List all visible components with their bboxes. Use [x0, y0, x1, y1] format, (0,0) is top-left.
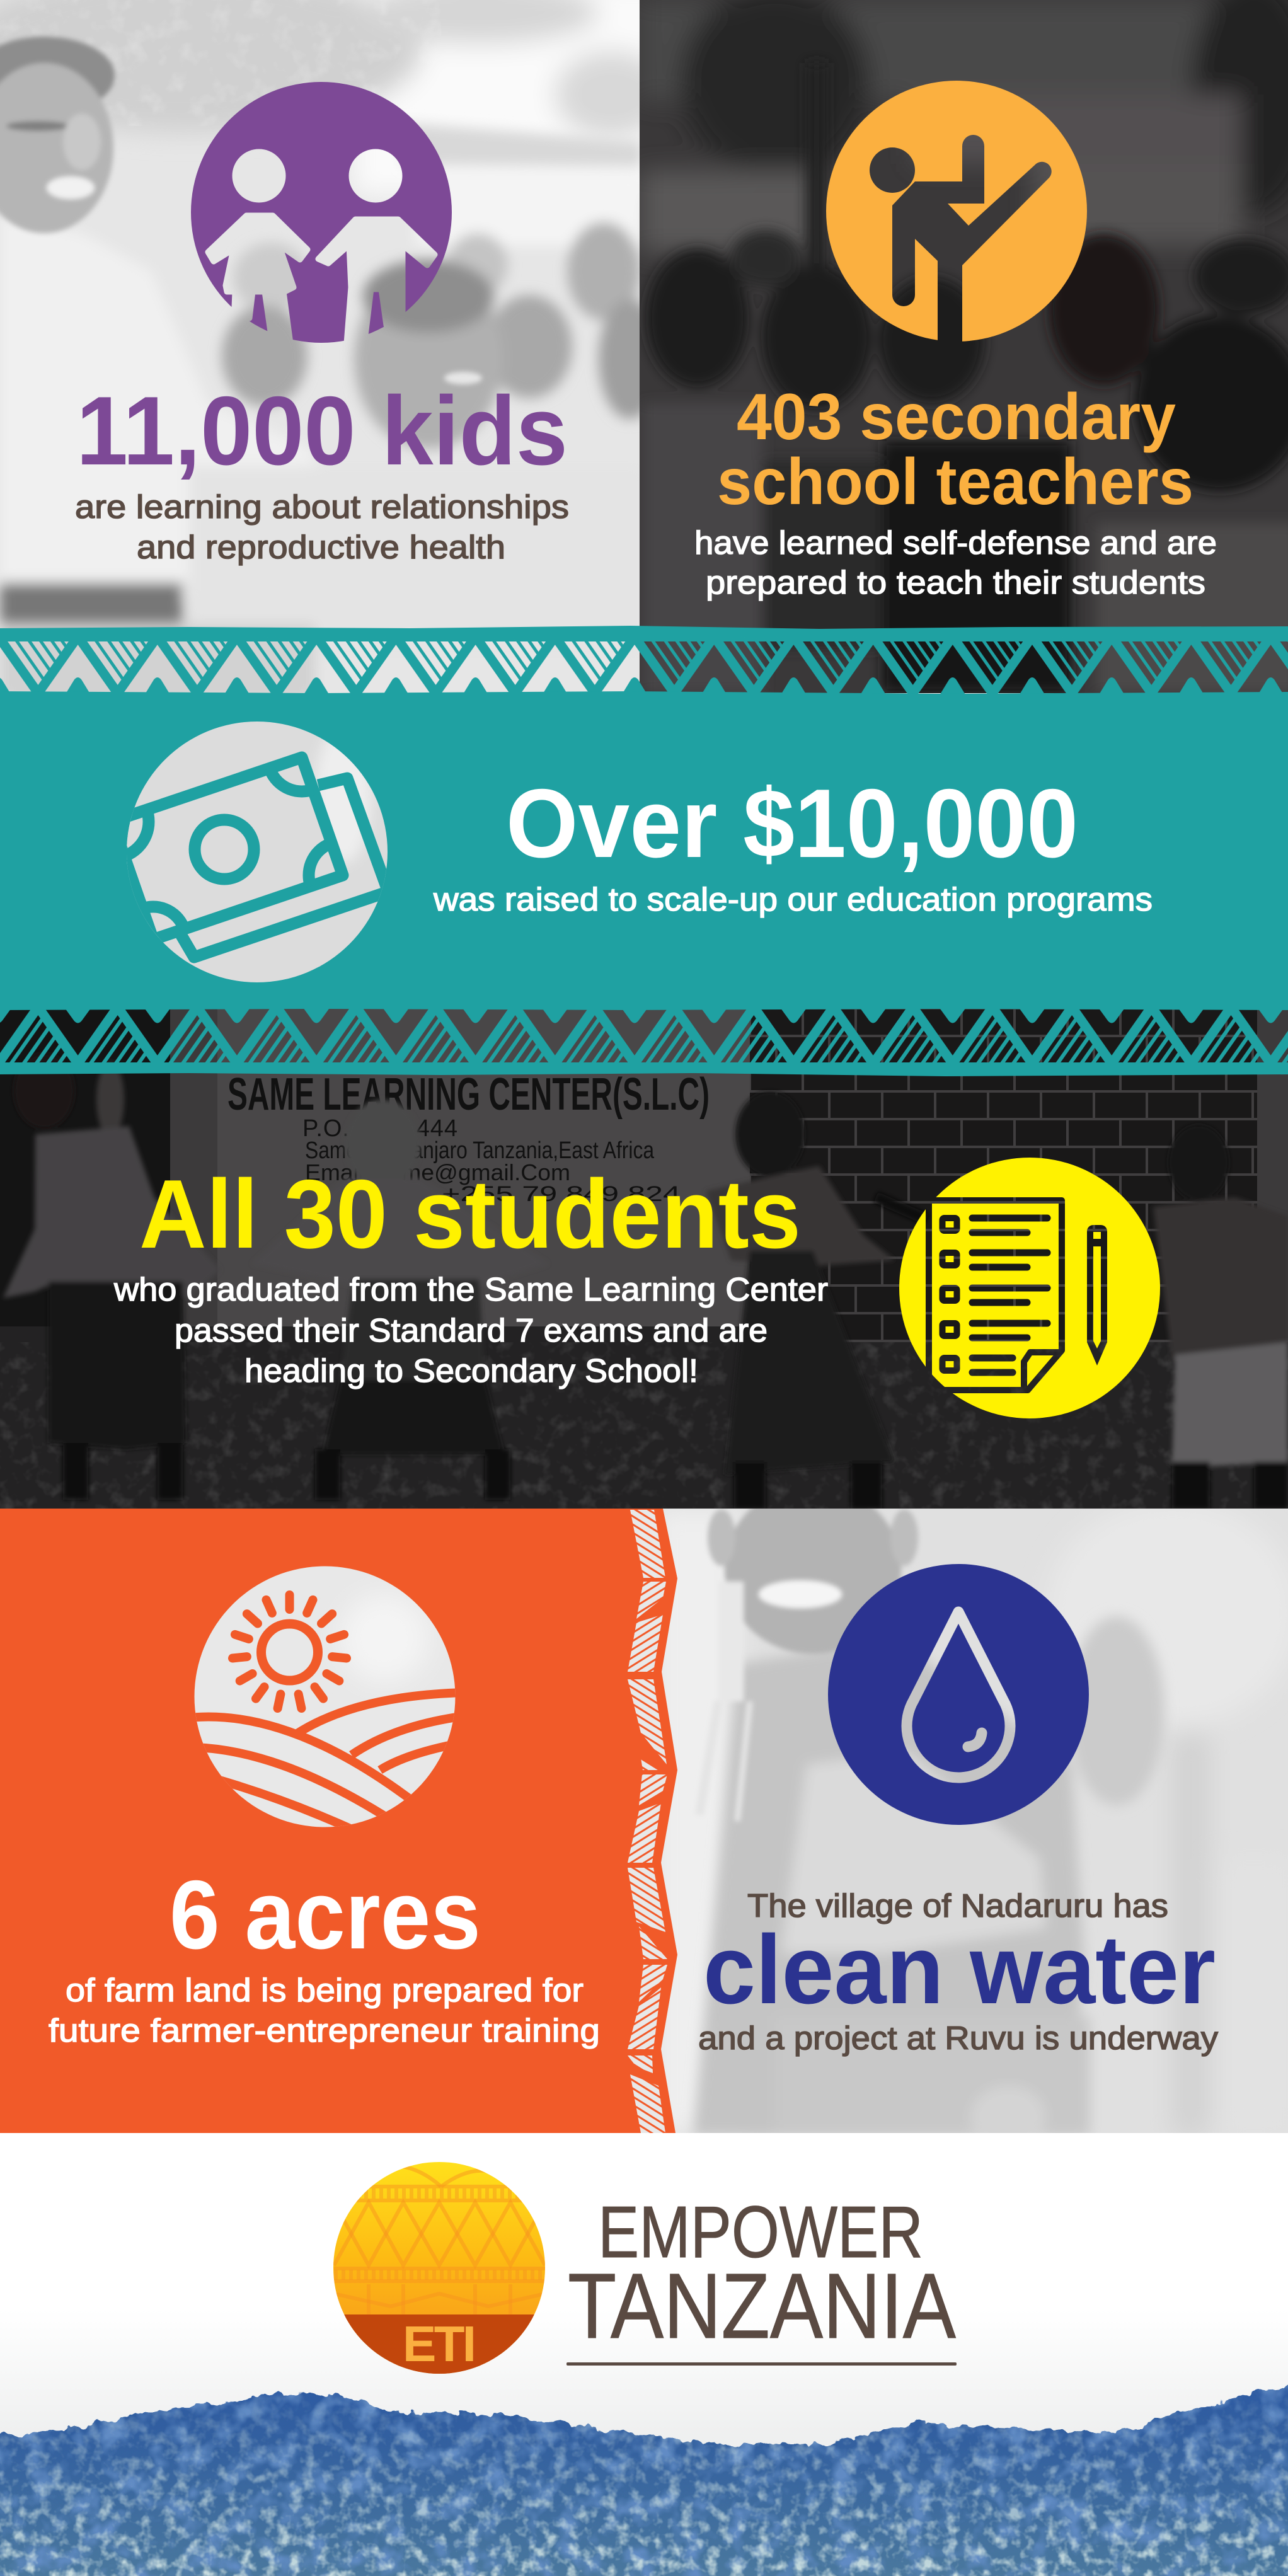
icon: exam checklist and pencil in yellow circle [899, 1158, 1160, 1418]
panel: 11,000 kids [0, 0, 668, 699]
patterned teal band [0, 626, 1288, 1076]
logo wordmark: EMPOWER: EMPOWER [598, 2191, 923, 2273]
text: are learning about relationships and reproductive health: are learning about relationships [75, 489, 569, 526]
panel: clean water photo [655, 1484, 1288, 2149]
text: of farm land is being prepared: of farm land is being prepared for [66, 1972, 584, 2009]
panel: same learning center photo [0, 1005, 1288, 1509]
text: who graduated from the Same Learning Center: passed their Standard 7 exams and are [175, 1313, 768, 1349]
heading: 11,000 kids: 11,000 kids [76, 376, 568, 485]
hatched vertical border [628, 1510, 667, 2133]
photo: children and school building, dark [640, 0, 1288, 693]
panel: footer [0, 2133, 1288, 2576]
icon: self-defense kick in orange circle [826, 81, 1087, 342]
sign text in the photo: +255 79 849 824 [442, 1182, 681, 1206]
text: The village of Nadaruru has: The village of Nadaruru has [747, 1888, 1168, 1924]
text: of farm land is being prepared: future farmer-entrepreneur training [49, 2013, 600, 2049]
text: have learned self-defense: prepared to teach their students [706, 565, 1205, 601]
logo underline [566, 2362, 957, 2366]
sign text in the photo [227, 1069, 710, 1206]
sign text in the photo: P.O. BOX 444 [302, 1115, 457, 1142]
photo: man with children, light grey [0, 0, 668, 699]
panel: 403 secondary school teachers [640, 0, 1288, 693]
text: of farm land is being prepared [49, 1972, 600, 2049]
heading: 403 secondary school teachers [717, 381, 1193, 519]
text: are learning about relationships and reproductive health [75, 489, 569, 566]
sky gradient [0, 2133, 1288, 2486]
band fill [0, 691, 1288, 1010]
heading: All 30 students: All 30 students [139, 1159, 801, 1268]
text: who graduated from the Same Learning Center: heading to Secondary School! [244, 1353, 698, 1389]
icon: banknotes in grey circle [127, 722, 388, 982]
sign text in the photo: SAME LEARNING CENTER(S.L.C) [227, 1069, 710, 1120]
text: have learned self-defense [694, 525, 1217, 601]
text: are learning about relationships and reproductive health: and reproductive health [137, 529, 505, 566]
photo: children dancing [3, 1053, 1288, 1509]
text: and a project at Ruvu is underway: and a project at Ruvu is underway [698, 2020, 1218, 2057]
orange panel with zigzag edge [0, 1509, 677, 2133]
text: who graduated from the Same Learning Center [113, 1272, 828, 1389]
text: who graduated from the Same Learning Center: who graduated from the Same Learning Center [113, 1272, 828, 1308]
wall, door and ground [0, 1005, 1288, 1509]
panel: 6 acres [0, 1509, 677, 2133]
top hatch border [0, 626, 1288, 694]
icon: two children holding hands in purple circle [191, 82, 452, 343]
logo letters: ETI: ETI [403, 2316, 476, 2372]
logo: ETI sun emblem [328, 2162, 555, 2378]
bottom hatch border [0, 1007, 1288, 1076]
heading: 403 secondary school teachers: school teachers [717, 446, 1193, 519]
photo: forested hills [0, 2357, 1288, 2576]
heading: 403 secondary school teachers: 403 secondary [737, 381, 1176, 454]
text: was raised to scale-up our education programs: was raised to scale-up our education programs [433, 882, 1153, 918]
sign text in the photo: Email: same@gmail.Com [305, 1159, 570, 1185]
logo wordmark: TANZANIA: TANZANIA [568, 2255, 956, 2358]
heading: 6 acres: 6 acres [170, 1860, 481, 1969]
icon: sun over farm fields [189, 1567, 463, 1831]
photo: smiling woman carrying baby, pale grey [655, 1500, 1288, 2136]
text: have learned self-defense: have learned self-defense and are [694, 525, 1217, 561]
heading: clean water: clean water [703, 1915, 1216, 2024]
heading: Over $10,000: Over $10,000 [506, 769, 1078, 878]
sign text in the photo: Same, Kilimanjaro Tanzania,East Africa [305, 1137, 655, 1164]
icon: water drop in navy circle [828, 1564, 1089, 1825]
